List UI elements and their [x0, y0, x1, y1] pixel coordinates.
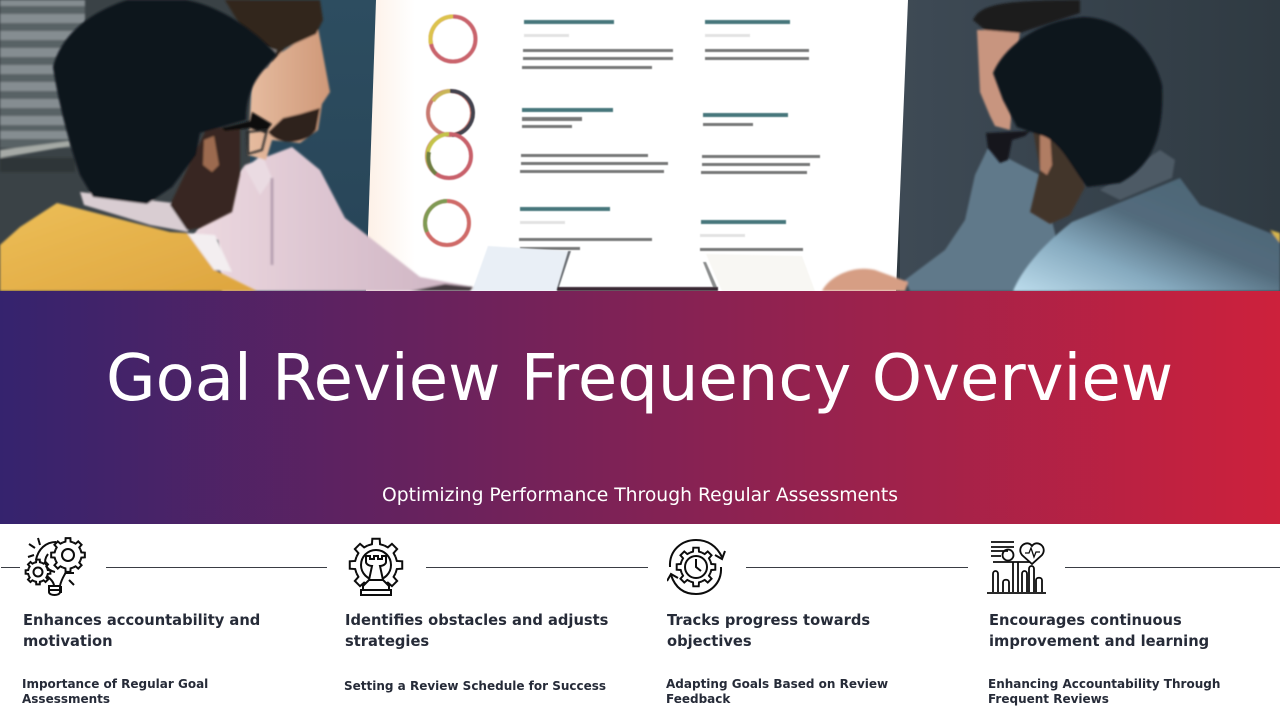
man in grey shirt [822, 0, 1175, 291]
point 1 heading: Enhances accountability and [23, 612, 260, 629]
icon: lightbulb with gears [24, 537, 86, 596]
point 3 heading [667, 612, 870, 650]
photo: team reviewing a goal board [0, 0, 1280, 291]
title banner [0, 291, 1280, 524]
point 4 heading: improvement and learning [989, 633, 1209, 650]
point 2 heading: strategies [345, 633, 429, 650]
point 2 heading: Identifies obstacles and adjusts [345, 612, 608, 629]
point 1 heading: motivation [23, 633, 113, 650]
icon: clock gear with circular arrows [667, 539, 726, 595]
man in light blue shirt, back view [986, 17, 1280, 291]
point 2 heading [345, 612, 608, 650]
subtitle: Optimizing Performance Through Regular Assessments [382, 485, 898, 506]
window blinds [0, 0, 85, 172]
man in pink shirt [190, 0, 473, 291]
point 3 caption: Adapting Goals Based on Review [666, 677, 888, 691]
point 3 caption [666, 677, 888, 706]
point 2 caption: Setting a Review Schedule for Success [344, 679, 606, 693]
point 4 heading [989, 612, 1209, 650]
point 3 heading: Tracks progress towards [667, 612, 870, 629]
point 4 caption: Frequent Reviews [988, 692, 1109, 706]
point 1 caption: Importance of Regular Goal [22, 677, 208, 691]
man in yellow shirt, back view [0, 0, 277, 291]
icon: gear with chess rook [348, 538, 404, 596]
point 1 caption [22, 677, 208, 706]
point 3 heading: objectives [667, 633, 752, 650]
point 3 caption: Feedback [666, 692, 730, 706]
point 1 heading [23, 612, 260, 650]
title: Goal Review Frequency Overview [106, 342, 1173, 416]
point 4 caption [988, 677, 1220, 706]
point 4 caption: Enhancing Accountability Through [988, 677, 1220, 691]
laptops on table [472, 246, 815, 291]
board text lines [519, 20, 820, 251]
point 4 heading: Encourages continuous [989, 612, 1182, 629]
white board [366, 0, 908, 291]
background walls [0, 0, 1280, 291]
icon: person with charts and heart [987, 541, 1046, 594]
board rings [425, 16, 476, 245]
point 1 caption: Assessments [22, 692, 110, 706]
